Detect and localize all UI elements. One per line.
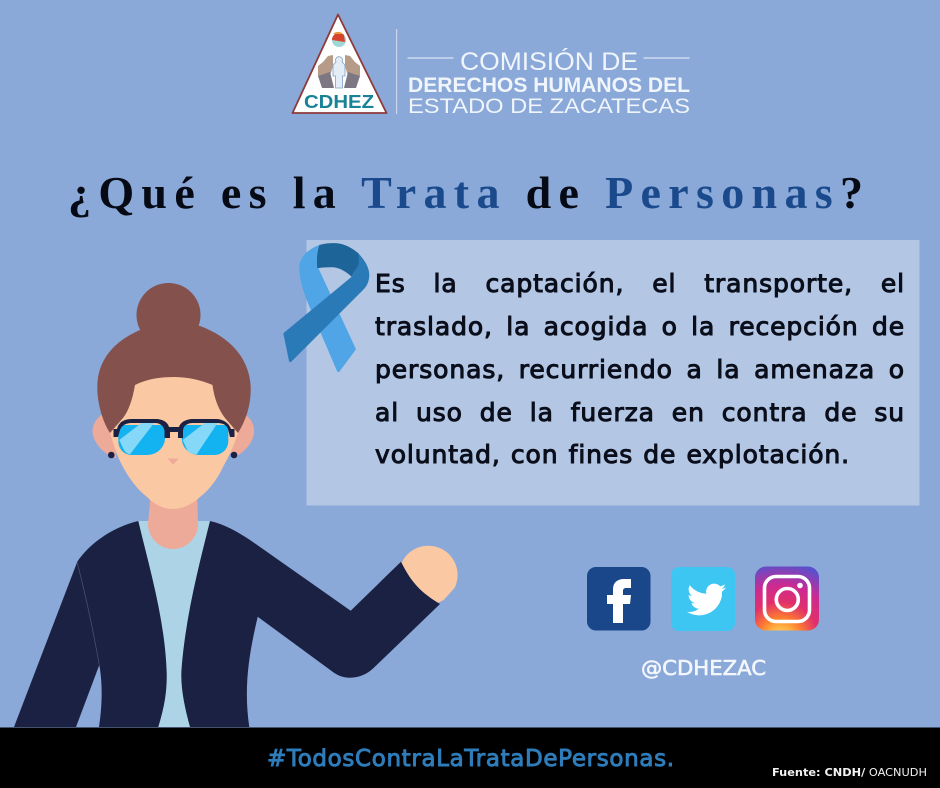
definition text: al uso de la fuerza en contra de su [375, 398, 905, 427]
logo: CDHEZ triangle [292, 14, 386, 113]
icon: blue ribbon [283, 243, 369, 372]
figure: neck [148, 495, 198, 549]
social handle: @CDHEZAC [641, 656, 766, 680]
logo: vertical divider [396, 29, 397, 114]
figure: jacket [14, 521, 440, 727]
figure: ears and earrings [92, 413, 254, 458]
logo: commission name: ESTADO DE ZACATECAS [408, 94, 690, 118]
logo: commission name: DERECHOS HUMANOS DEL [408, 74, 690, 97]
footer band [0, 728, 940, 788]
title: ¿Qué es la Trata de Personas? [68, 167, 863, 218]
figure: nose [168, 458, 179, 464]
icon: instagram [755, 566, 819, 630]
logo: CDHEZ triangle: CDHEZ [304, 92, 374, 112]
figure: sunglasses [114, 419, 234, 455]
figure: face [110, 370, 238, 509]
hashtag: #TodosContraLaTrataDePersonas. [267, 746, 674, 772]
figure: jacket seam [77, 562, 99, 665]
definition text: personas, recurriendo a la amenaza o [375, 355, 905, 384]
definition text: voluntad, con fines de explotación. [375, 440, 850, 469]
figure: hair and bun [97, 283, 251, 433]
logo: commission name [408, 47, 690, 118]
panel: definition background [306, 240, 920, 506]
definition text: traslado, la acogida o la recepción de [375, 312, 905, 341]
figure: woman pointing [14, 283, 458, 727]
icon: twitter [671, 567, 735, 631]
figure: shirt [138, 521, 210, 727]
source credit: Fuente: CNDH/ OACNUDH [772, 767, 927, 779]
icon: facebook [587, 567, 650, 630]
definition text: Es la captación, el transporte, el [375, 269, 905, 298]
figure: raised hand [399, 546, 458, 604]
logo: commission name: COMISIÓN DE [460, 47, 638, 76]
